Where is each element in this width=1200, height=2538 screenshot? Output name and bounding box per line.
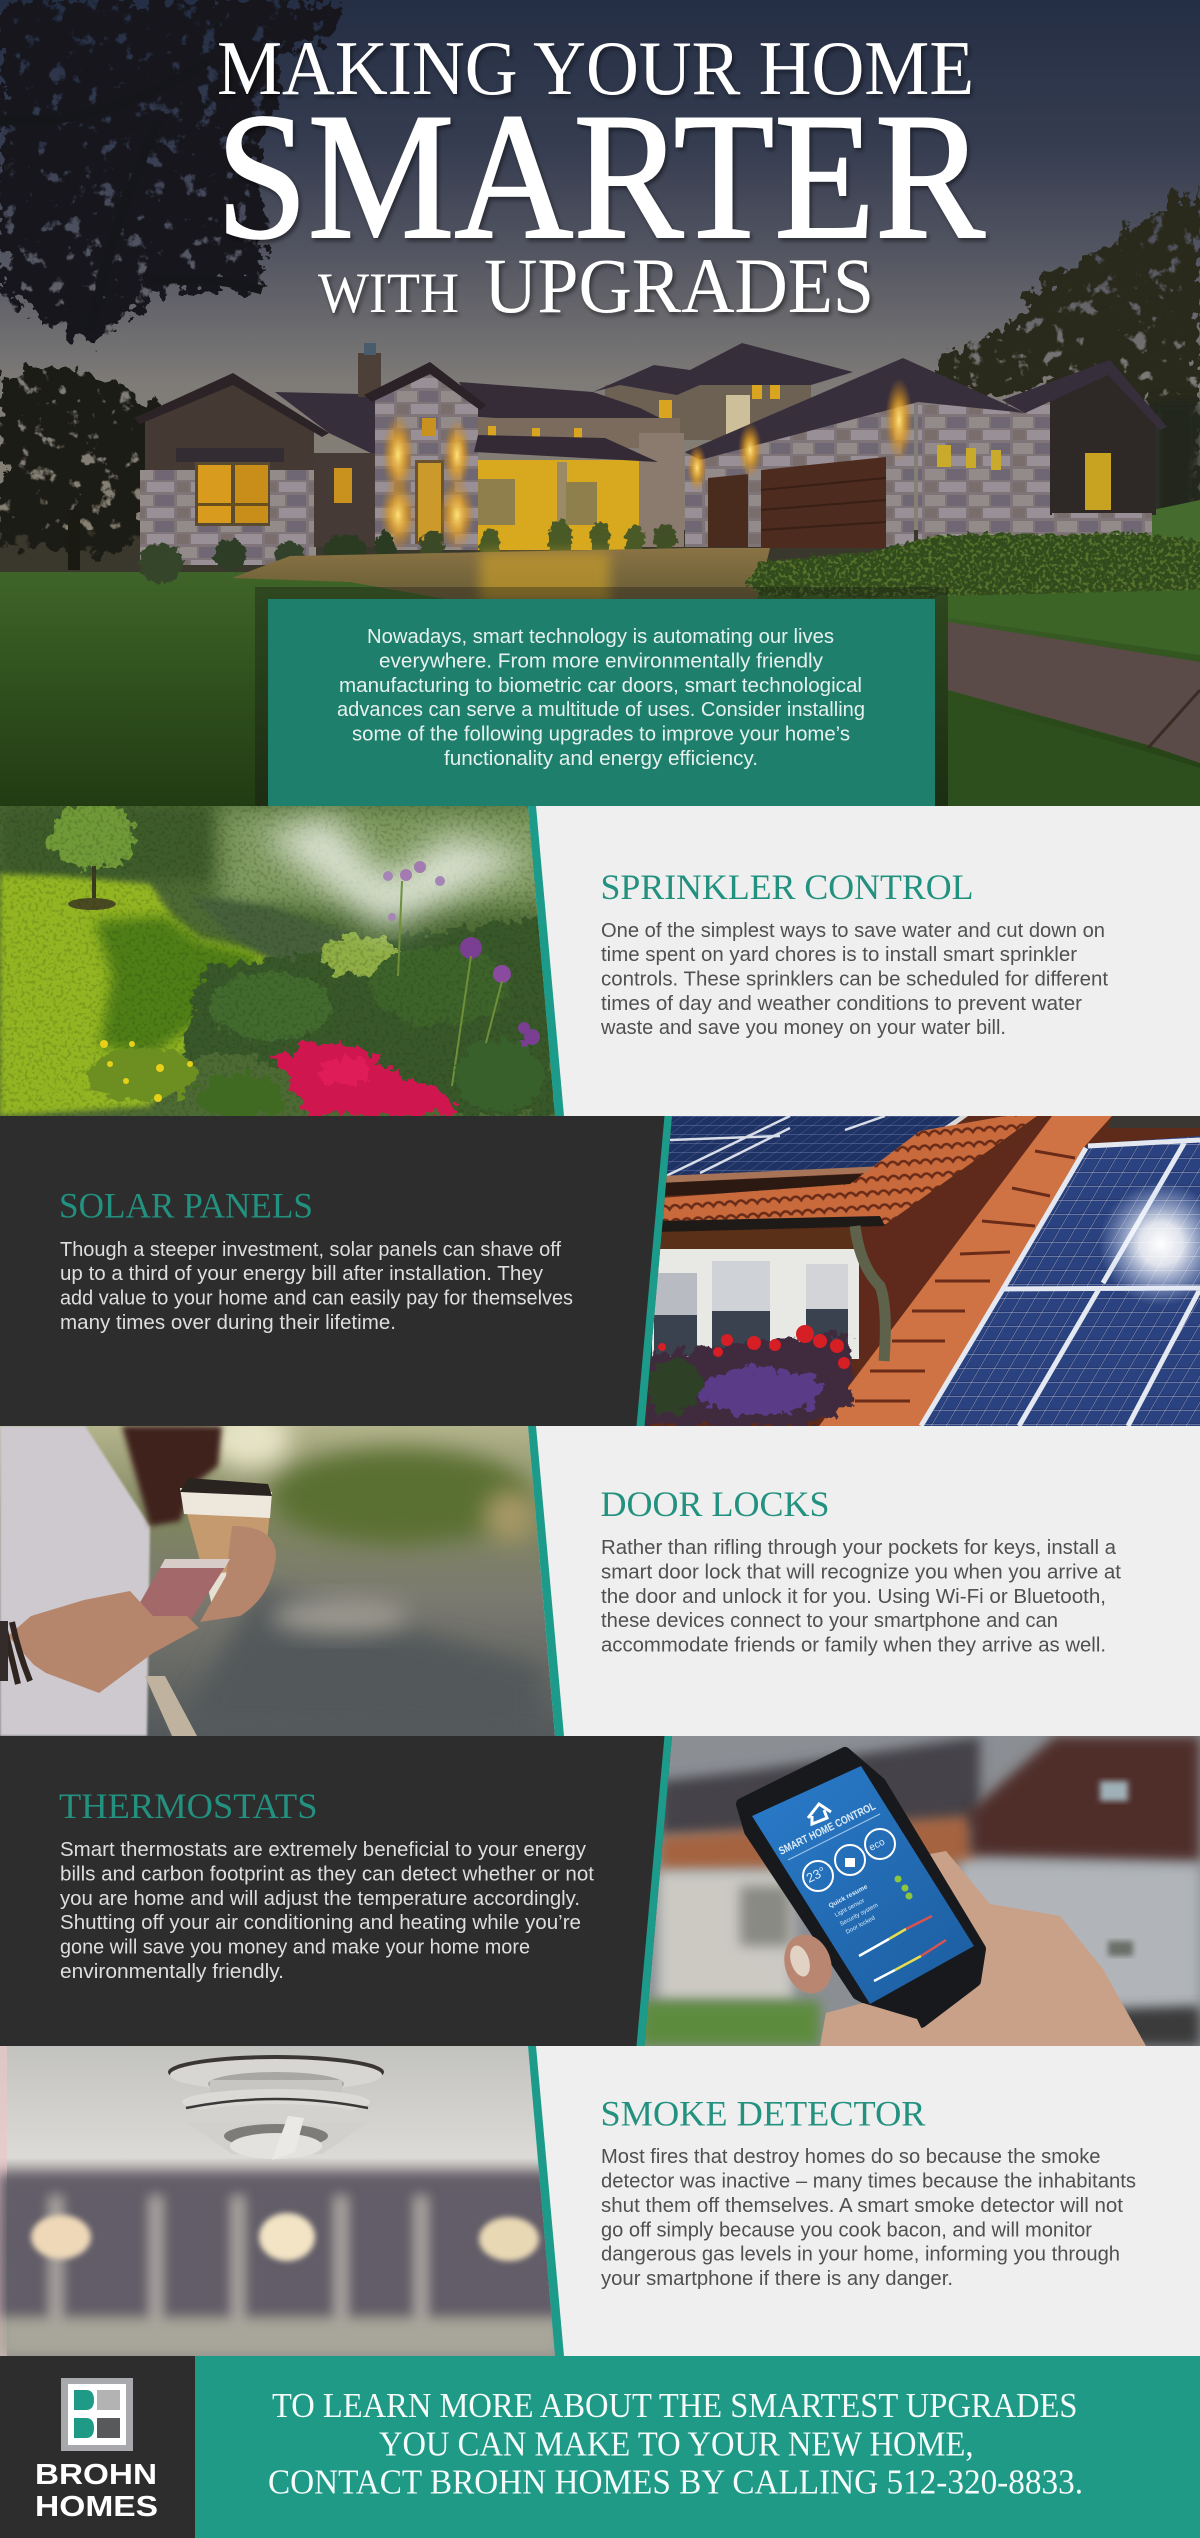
divider stripe — [636, 1736, 672, 2046]
body text: One of the simplest ways to save water and cut down on — [601, 920, 1105, 942]
heading: DOOR LOCKS — [600, 1484, 830, 1524]
wet driveway — [232, 548, 770, 599]
title: MAKING YOUR HOME — [217, 25, 974, 111]
divider stripe — [636, 1116, 672, 1426]
body text: these devices connect to your smartphone and can — [601, 1610, 1058, 1632]
body text: the door and unlock it for you. Using Wi-Fi or Bluetooth, — [601, 1586, 1106, 1608]
body text — [600, 920, 1108, 1039]
call to action text: CONTACT BROHN HOMES BY CALLING 512-320-8833. — [268, 2462, 1083, 2502]
hero photo: house at dusk — [0, 0, 1200, 806]
body text: smart door lock that will recognize you when you arrive at — [601, 1562, 1121, 1584]
footer banner — [195, 2356, 1200, 2538]
phone screen content: Light sensor — [834, 1898, 866, 1919]
body text: Smart thermostats are extremely beneficial to your energy — [60, 1839, 586, 1861]
heading: SPRINKLER CONTROL — [600, 867, 974, 907]
photo: hand holding smart phone — [630, 1736, 1200, 2046]
intro text box: advances can serve a multitude of uses. Consider installing — [337, 699, 865, 721]
house: garage wing — [685, 358, 1054, 548]
body text: many times over during their lifetime. — [60, 1312, 396, 1334]
heading: THERMOSTATS — [59, 1786, 318, 1826]
phone screen content: Security system — [839, 1903, 879, 1928]
panel: solar panels — [0, 1116, 1200, 1426]
body text: up to a third of your energy bill after installation. They — [60, 1263, 543, 1285]
house: chimney — [358, 343, 381, 397]
green hedge — [746, 532, 1200, 596]
body text: shut them off themselves. A smart smoke detector will not — [601, 2195, 1123, 2217]
logo panel: Brohn Homes — [0, 2356, 195, 2538]
house: left wing — [134, 373, 329, 565]
title: SMARTER — [216, 77, 985, 277]
house: main roof — [459, 382, 660, 418]
logo wordmark: BROHN — [35, 2459, 157, 2491]
body text: Shutting off your air conditioning and heating while you’re — [60, 1912, 581, 1934]
body text: add value to your home and can easily pay for themselves — [60, 1288, 573, 1310]
body text: gone will save you money and make your home more — [60, 1936, 530, 1958]
intro backing panel — [255, 587, 948, 806]
body text — [601, 1537, 1121, 1656]
panel: hero — [0, 0, 1200, 806]
intro text box: Nowadays, smart technology is automating our lives — [367, 626, 834, 648]
body text: dangerous gas levels in your home, informing you through — [601, 2244, 1120, 2266]
call to action text: YOU CAN MAKE TO YOUR NEW HOME, — [379, 2424, 974, 2464]
phone screen content — [777, 1800, 946, 1981]
photo: garden sprinkler — [0, 802, 560, 1118]
house: dark right wing — [1002, 360, 1167, 540]
phone screen content: Door locked — [845, 1915, 876, 1936]
body text: you are home and will adjust the temperature accordingly. — [60, 1888, 580, 1910]
title: UPGRADES — [484, 242, 874, 329]
body text: your smartphone if there is any danger. — [601, 2268, 953, 2290]
panel: sprinkler control — [0, 802, 1200, 1118]
intro text box: functionality and energy efficiency. — [444, 748, 758, 770]
body text: controls. These sprinklers can be scheduled for different — [601, 968, 1108, 990]
phone screen content: SMART HOME CONTROL — [777, 1800, 878, 1858]
intro text box — [268, 599, 935, 806]
phone screen content: eco — [867, 1837, 887, 1854]
logo icon — [61, 2378, 133, 2451]
side lawn and path — [948, 622, 1200, 763]
divider stripe — [528, 1426, 564, 1736]
heading: SOLAR PANELS — [59, 1186, 313, 1226]
photo: roof with solar panels — [630, 1116, 1200, 1426]
divider stripe — [528, 2046, 564, 2356]
body text: Though a steeper investment, solar panels can shave off — [60, 1239, 561, 1261]
intro text box: some of the following upgrades to improve your home’s — [352, 724, 850, 746]
intro text box: manufacturing to biometric car doors, smart technological — [339, 675, 862, 697]
body text: waste and save you money on your water bill. — [600, 1017, 1006, 1039]
body text: times of day and weather conditions to prevent water — [601, 993, 1082, 1015]
panel: thermostats — [0, 1736, 1200, 2046]
logo wordmark — [35, 2459, 158, 2523]
smoke detector device — [168, 2055, 384, 2160]
house: glowing porch — [474, 435, 658, 550]
phone screen content: 23° — [804, 1864, 828, 1886]
body text: accommodate friends or family when they arrive as well. — [601, 1634, 1106, 1656]
shrubs by house — [139, 520, 677, 583]
heading: SMOKE DETECTOR — [600, 2094, 926, 2134]
body text — [60, 1839, 594, 1983]
call to action text — [268, 2386, 1083, 2502]
body text — [60, 1239, 573, 1334]
body text: detector was inactive – many times because the inhabitants — [601, 2170, 1136, 2192]
divider stripe — [528, 806, 564, 1116]
photo: ceiling smoke detector — [0, 2046, 560, 2356]
body text: time spent on yard chores is to install smart sprinkler — [601, 944, 1077, 966]
intro text box: everywhere. From more environmentally friendly — [379, 650, 823, 672]
logo wordmark: HOMES — [35, 2491, 158, 2523]
title — [216, 25, 985, 329]
panel: door locks — [0, 1408, 1200, 1736]
body text: Rather than rifling through your pockets for keys, install a — [601, 1537, 1117, 1559]
house: stone gable — [364, 362, 486, 551]
phone screen content: Quick resume — [828, 1883, 869, 1910]
body text: go off simply because you cook bacon, and will monitor — [601, 2220, 1092, 2242]
body text: bills and carbon footprint as they can detect whether or not — [60, 1864, 594, 1886]
house: centre roof — [275, 392, 375, 453]
panel: smoke detector — [0, 2046, 1200, 2356]
photo: woman with phone and coffee — [0, 1408, 560, 1736]
call to action text: TO LEARN MORE ABOUT THE SMARTEST UPGRADES — [272, 2386, 1078, 2425]
house: upper tower — [593, 343, 853, 447]
body text: Most fires that destroy homes do so because the smoke — [601, 2146, 1100, 2168]
title: WITH — [318, 262, 459, 325]
body text: environmentally friendly. — [60, 1961, 284, 1983]
body text — [601, 2146, 1136, 2290]
